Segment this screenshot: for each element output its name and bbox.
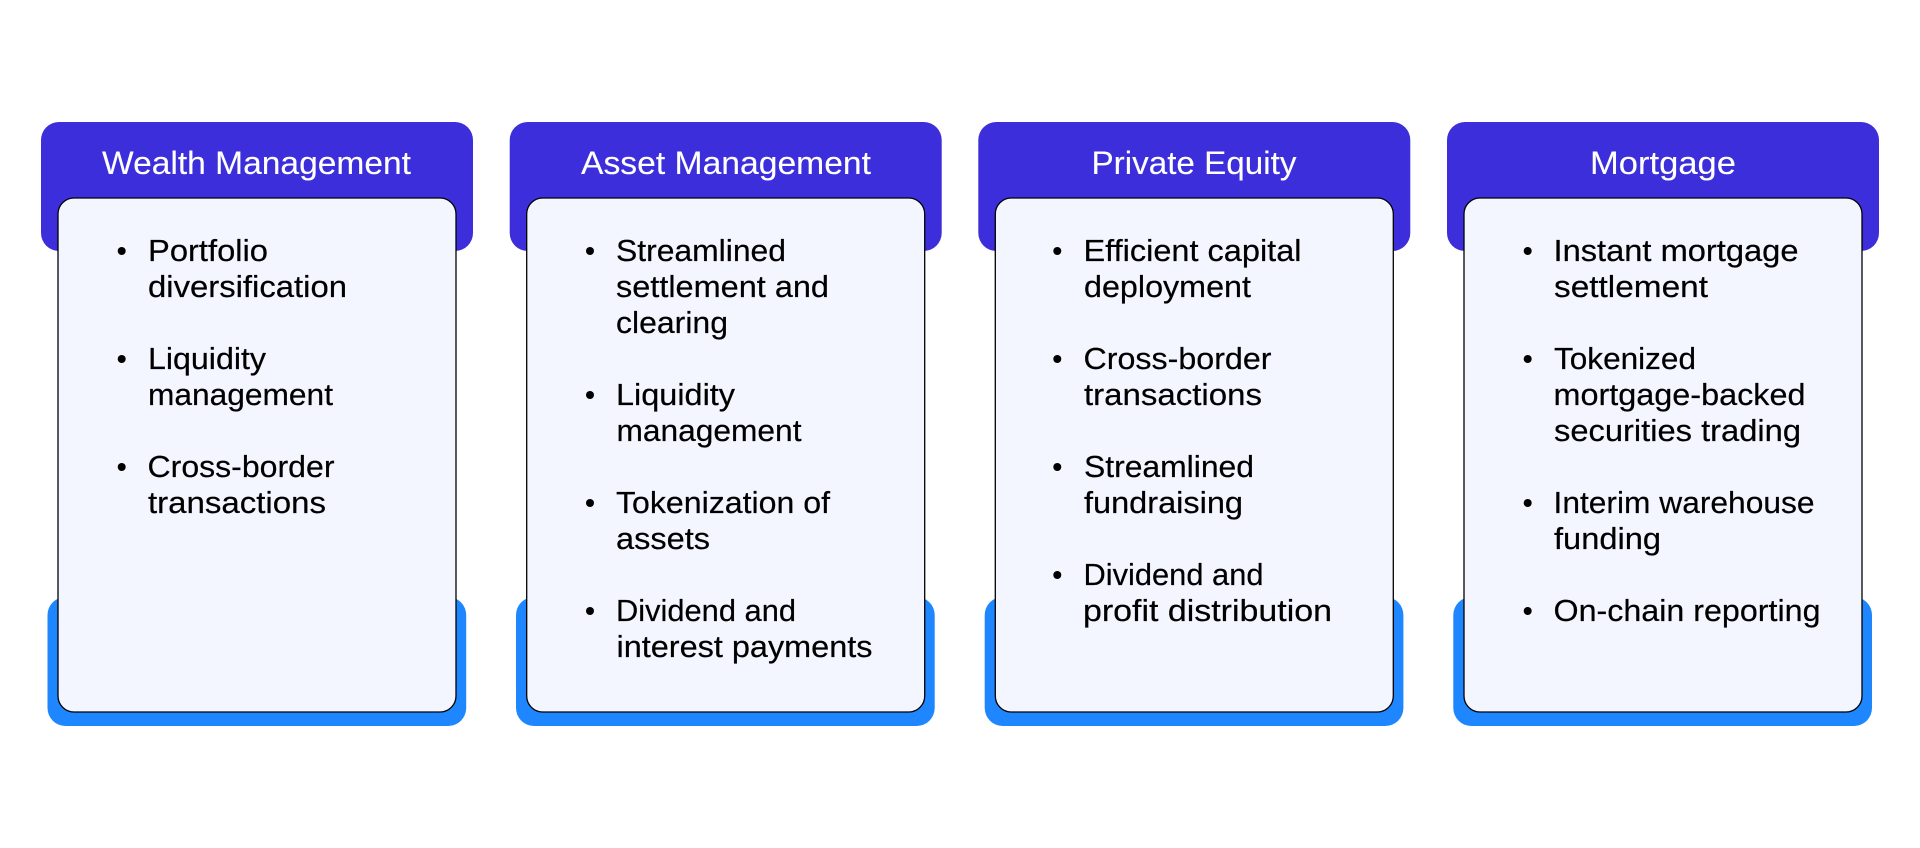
- list item: Cross-border transactions: Cross-border: [148, 450, 334, 484]
- blue base: [516, 597, 935, 726]
- list item: Efficient capital deployment: deployment: [1084, 270, 1252, 304]
- list item: Streamlined fundraising: Streamlined: [1084, 450, 1254, 484]
- list item: Efficient capital deployment: [1053, 234, 1302, 304]
- header tab: [1447, 122, 1879, 251]
- list item: Efficient capital deployment: Efficient capital: [1084, 234, 1302, 268]
- list item: Dividend and profit distribution: [1053, 558, 1332, 628]
- list item: Liquidity management: [118, 342, 334, 412]
- list item: Tokenized mortgage-backed securities trading: Tokenized: [1554, 342, 1696, 376]
- panel: Private Equity: [978, 122, 1410, 726]
- list item: Tokenization of assets: Tokenization of: [616, 486, 831, 520]
- list item: Cross-border transactions: transactions: [148, 486, 326, 520]
- list item: Dividend and interest payments: interest payments: [616, 630, 872, 664]
- list item: Liquidity management: [586, 378, 802, 448]
- list item: Cross-border transactions: [1053, 342, 1272, 412]
- header tab: [510, 122, 942, 251]
- list item: Liquidity management: Liquidity: [148, 342, 267, 376]
- heading: Wealth Management: [102, 145, 411, 181]
- list item: Liquidity management: management: [616, 414, 802, 448]
- card: [58, 198, 456, 712]
- panel: Asset Management: [510, 122, 942, 726]
- list item: Streamlined settlement and clearing: Streamlined: [616, 234, 786, 268]
- list item: Cross-border transactions: Cross-border: [1084, 342, 1272, 376]
- list item: Interim warehouse funding: [1524, 486, 1814, 556]
- list item: Streamlined fundraising: [1053, 450, 1254, 520]
- list item: Dividend and profit distribution: profit distribution: [1083, 594, 1332, 628]
- card: [527, 198, 925, 712]
- list item: Portfolio diversification: diversification: [148, 270, 347, 304]
- list item: Streamlined settlement and clearing: [586, 234, 829, 340]
- heading: Asset Management: [581, 145, 871, 181]
- list item: Dividend and profit distribution: Dividend and: [1084, 558, 1264, 592]
- list item: Interim warehouse funding: funding: [1554, 522, 1661, 556]
- list item: Interim warehouse funding: Interim warehouse: [1554, 486, 1814, 520]
- list item: Tokenized mortgage-backed securities trading: mortgage-backed: [1554, 378, 1806, 412]
- list item: Portfolio diversification: [118, 234, 347, 304]
- list item: Dividend and interest payments: Dividend and: [616, 594, 796, 628]
- list item: Liquidity management: Liquidity: [616, 378, 736, 412]
- list item: Liquidity management: management: [148, 378, 334, 412]
- list item: Dividend and interest payments: [586, 594, 872, 664]
- list item: Instant mortgage settlement: Instant mortgage: [1554, 234, 1798, 268]
- list item: Streamlined fundraising: fundraising: [1084, 486, 1243, 520]
- list item: Tokenized mortgage-backed securities trading: securities trading: [1554, 414, 1801, 448]
- panel: Mortgage: [1447, 122, 1879, 726]
- blue base: [985, 597, 1403, 726]
- list item: Cross-border transactions: [118, 450, 334, 520]
- list item: Instant mortgage settlement: [1524, 234, 1798, 304]
- list item: Streamlined settlement and clearing: clearing: [616, 306, 728, 340]
- blue base: [48, 597, 466, 726]
- list item: Streamlined settlement and clearing: settlement and: [616, 270, 829, 304]
- list item: Tokenized mortgage-backed securities trading: [1524, 342, 1806, 448]
- list item: Tokenization of assets: [586, 486, 831, 556]
- header tab: [41, 122, 473, 251]
- header tab: [978, 122, 1410, 251]
- list item: Portfolio diversification: Portfolio: [148, 234, 268, 268]
- heading: Private Equity: [1092, 145, 1297, 181]
- card: [995, 198, 1393, 712]
- list item: Instant mortgage settlement: settlement: [1554, 270, 1709, 304]
- blue base: [1453, 597, 1872, 726]
- list item: Cross-border transactions: transactions: [1084, 378, 1262, 412]
- heading: Mortgage: [1590, 145, 1736, 181]
- list item: Tokenization of assets: assets: [616, 522, 710, 556]
- card: [1464, 198, 1862, 712]
- list item: On-chain reporting: On-chain reporting: [1554, 594, 1820, 628]
- panel: Wealth Management: [41, 122, 473, 726]
